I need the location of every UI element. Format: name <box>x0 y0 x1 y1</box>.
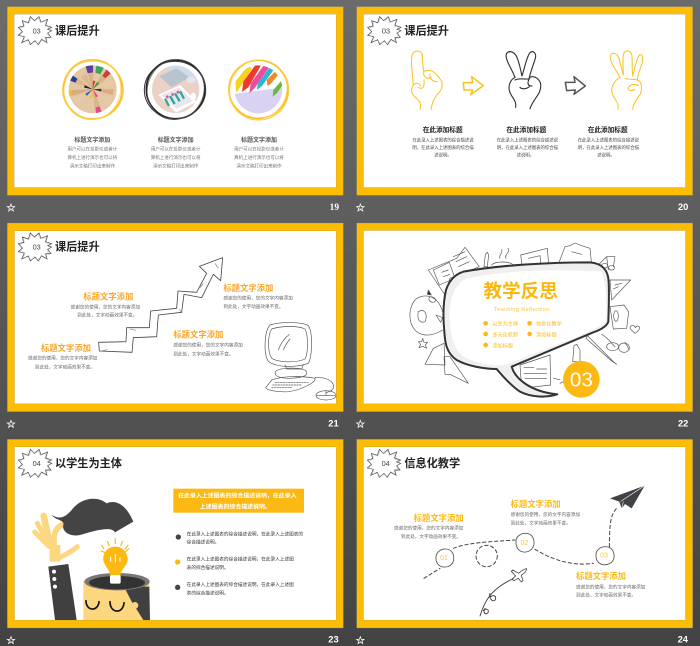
text block 1: 到此处，文字动画效果不变。 <box>401 533 461 540</box>
slide 24 frame <box>357 439 693 628</box>
caption 3 <box>234 136 284 170</box>
caption 3: 标题文字添加 <box>241 136 277 144</box>
caption 3: 用户可以在投影仪或者计 <box>234 146 284 153</box>
summary banner: 上述图表的综合描述说明。 <box>200 503 271 511</box>
caption 1 <box>412 125 474 159</box>
hair <box>52 499 133 535</box>
caption 2: 算机上进行演示也可以将 <box>151 154 201 161</box>
head back <box>124 587 150 620</box>
topic list <box>483 320 562 349</box>
text block 4: 标题文字添加 <box>41 343 91 353</box>
bullet 2: 表的综合描述说明。 <box>187 564 229 571</box>
step 02: 02 <box>520 540 528 547</box>
badge 03: 03 <box>33 243 41 252</box>
heading: 信息化教学 <box>404 456 460 470</box>
text block 1: 感谢您的使用，您的文字内容添加 <box>71 303 140 310</box>
text block 2: 感谢您的使用，您的文字内容添加 <box>223 295 293 302</box>
computer sketch <box>265 323 336 400</box>
text block 4: 感谢您的使用，您的文字内容添加 <box>28 355 98 362</box>
bullet 3: 表的综合描述说明。 <box>187 589 229 596</box>
text block 3: 到此处，文字动画效果不变。 <box>173 350 233 357</box>
badge 04 <box>18 449 52 477</box>
slide 23 white panel <box>15 447 336 620</box>
eyes <box>86 601 124 611</box>
slide 23 frame <box>7 439 343 628</box>
text block 3: 标题文字添加 <box>173 330 223 340</box>
topic list: 添加标题 <box>536 330 557 338</box>
page number: 19 <box>330 203 339 213</box>
caption 1: 在此录入上述图表的综合描述说 <box>412 137 474 144</box>
ear <box>132 602 138 609</box>
star icon <box>357 204 364 211</box>
bullet 1 <box>176 530 303 545</box>
text block 3: 感谢您的使用，您的文字内容添加 <box>576 583 646 590</box>
caption 3: 算机上进行演示也可以将 <box>234 154 284 161</box>
slide 21 <box>7 223 343 428</box>
slide 23 <box>7 439 343 645</box>
photo circle: tablet on desk <box>144 59 206 120</box>
caption 2: 演示文稿打印出来制作 <box>153 163 199 170</box>
subtitle: Teaching Reflection <box>494 307 550 313</box>
dashed flight path <box>424 508 617 578</box>
page number: 20 <box>678 202 688 212</box>
text block 4 <box>28 343 98 370</box>
slide 22 frame <box>357 223 693 412</box>
slide 19 white panel <box>14 14 336 187</box>
badge 03 <box>18 17 52 45</box>
caption 1: 演示文稿打印出来制作 <box>70 163 115 170</box>
heading: 课后提升 <box>404 23 449 37</box>
bullet 2 <box>175 556 294 571</box>
sleeve <box>48 564 77 620</box>
bullet 2: 在此录入上述图表的综合描述说明，在此录入上述图 <box>187 556 294 563</box>
slide 24 white panel <box>364 447 685 620</box>
rising stair arrow <box>99 258 223 352</box>
title: 教学反思 <box>483 281 558 302</box>
caption 1: 明，在此录入上述图表的综合描 <box>412 144 474 151</box>
caption 3: 明，在此录入上述图表的综合描 <box>578 144 640 151</box>
summary banner <box>173 489 304 513</box>
topic list: 多元化机制 <box>492 330 518 338</box>
caption 3: 在此添加标题 <box>588 125 628 134</box>
caption 2: 述说明。 <box>517 152 534 159</box>
caption 3: 演示文稿打印出来制作 <box>236 163 282 170</box>
badge 04: 04 <box>382 459 390 468</box>
icon: three finger hand <box>610 51 643 109</box>
icon: two finger hand <box>506 52 541 109</box>
page number: 22 <box>678 418 688 428</box>
topic list: 以生为主体 <box>492 320 519 328</box>
text block 1 <box>71 291 140 319</box>
text block 1: 标题文字添加 <box>83 291 133 301</box>
text block 3: 到此处，文字动画效果不变。 <box>576 591 636 598</box>
caption 3: 在此录入上述图表的综合描述说 <box>578 137 640 144</box>
slide 20 frame <box>357 7 693 195</box>
slide 20 white panel <box>364 14 685 187</box>
slide 22 <box>357 223 693 428</box>
slide 24 <box>357 439 693 645</box>
icon: one finger hand <box>412 51 442 109</box>
text block 2 <box>223 283 293 310</box>
text block 2: 标题文字添加 <box>511 499 561 509</box>
arrow 1 <box>463 77 483 95</box>
slide 19 frame <box>7 7 343 195</box>
bullet 1: 在此录入上述图表的综合描述说明，在此录入上述图表的 <box>187 530 303 537</box>
topic list: 信息化教学 <box>536 320 562 328</box>
badge 03: 03 <box>382 26 390 35</box>
slide 22 white panel <box>364 231 685 404</box>
caption 2 <box>151 136 201 170</box>
step 01: 01 <box>440 555 448 562</box>
text block 1: 标题文字添加 <box>414 513 464 523</box>
step 03 <box>596 547 614 565</box>
caption 1: 标题文字添加 <box>74 136 110 144</box>
caption 1 <box>67 136 118 170</box>
topic list: 添加标题 <box>492 341 513 349</box>
doodles behind the bubble <box>410 243 639 388</box>
arrow 2 <box>565 77 585 94</box>
star icon <box>357 637 364 644</box>
text block 2 <box>511 499 580 526</box>
text block 2: 到此处，文字动画效果不变。 <box>223 303 283 310</box>
head rim <box>84 573 150 590</box>
curly trail <box>480 579 513 616</box>
text block 3 <box>576 571 646 598</box>
step 02 <box>516 533 534 552</box>
star icon <box>7 637 15 644</box>
caption 1: 述说明。 <box>434 152 452 159</box>
caption 2: 在此添加标题 <box>506 125 547 134</box>
badge 04 <box>367 449 401 477</box>
heading: 课后提升 <box>55 240 100 254</box>
heading: 课后提升 <box>55 23 100 37</box>
star icon <box>357 420 364 427</box>
bullet 1: 综合描述说明。 <box>187 538 219 545</box>
photo circle: coloured pencils <box>228 60 290 120</box>
slide 21 white panel <box>15 231 336 404</box>
text block 3 <box>173 330 243 357</box>
caption 3 <box>578 125 640 159</box>
number circle <box>563 361 600 398</box>
text block 3: 标题文字添加 <box>576 571 626 581</box>
slide 21 frame <box>7 223 343 412</box>
text block 4: 到此处，文字动画效果不变。 <box>35 363 95 370</box>
text block 3: 感谢您的使用，您的文字内容添加 <box>173 342 243 349</box>
summary banner: 在此录入上述图表的综合描述说明，在此录入 <box>178 491 297 499</box>
text block 2: 标题文字添加 <box>223 283 273 293</box>
caption 2: 用户可以在投影仪或者计 <box>151 146 201 153</box>
text block 1: 感谢您的使用，您的文字内容添加 <box>394 525 464 532</box>
caption 3: 述说明。 <box>597 152 615 159</box>
icon: small airplane <box>511 569 527 582</box>
speech bubble <box>443 262 609 397</box>
slide 20 <box>357 7 693 212</box>
badge 03 <box>368 17 401 45</box>
bullet 3 <box>175 581 294 596</box>
hand holding hair <box>35 516 77 562</box>
badge 03: 03 <box>33 26 41 35</box>
head <box>83 581 149 620</box>
text block 1 <box>394 513 464 540</box>
page number: 24 <box>678 635 689 645</box>
star icon <box>7 204 15 211</box>
icon: paper plane <box>610 486 645 509</box>
caption 1: 在此添加标题 <box>423 125 463 134</box>
caption 2: 明，在此录入上述图表的综合描 <box>497 144 559 151</box>
number circle: 03 <box>570 369 593 392</box>
text block 1: 到此处，文字动画效果不变。 <box>77 312 137 319</box>
student illustration <box>35 499 150 620</box>
caption 1: 用户可以在投影仪或者计 <box>67 146 118 153</box>
text block 2: 到此处，文字动画效果不变。 <box>511 519 571 526</box>
caption 2 <box>497 125 559 159</box>
heading: 以学生为主体 <box>55 456 123 470</box>
badge 04: 04 <box>33 459 41 468</box>
page number: 21 <box>328 418 339 428</box>
caption 1: 算机上进行演示也可以将 <box>67 154 118 161</box>
slide 19 <box>7 7 343 213</box>
caption 2: 在此录入上述图表的综合描述说 <box>497 137 559 144</box>
bullet 3: 在此录入上述图表的综合描述说明，在此录入上述图 <box>187 581 294 588</box>
step 03: 03 <box>600 553 608 560</box>
star icon <box>7 420 15 427</box>
caption 2: 标题文字添加 <box>158 136 194 144</box>
step 01 <box>436 549 454 567</box>
text block 2: 感谢您的使用，您的文字内容添加 <box>511 511 580 518</box>
light bulb <box>101 538 129 584</box>
photo circle: pencils <box>62 58 124 120</box>
page number: 23 <box>328 635 339 645</box>
badge 03 <box>18 233 52 261</box>
